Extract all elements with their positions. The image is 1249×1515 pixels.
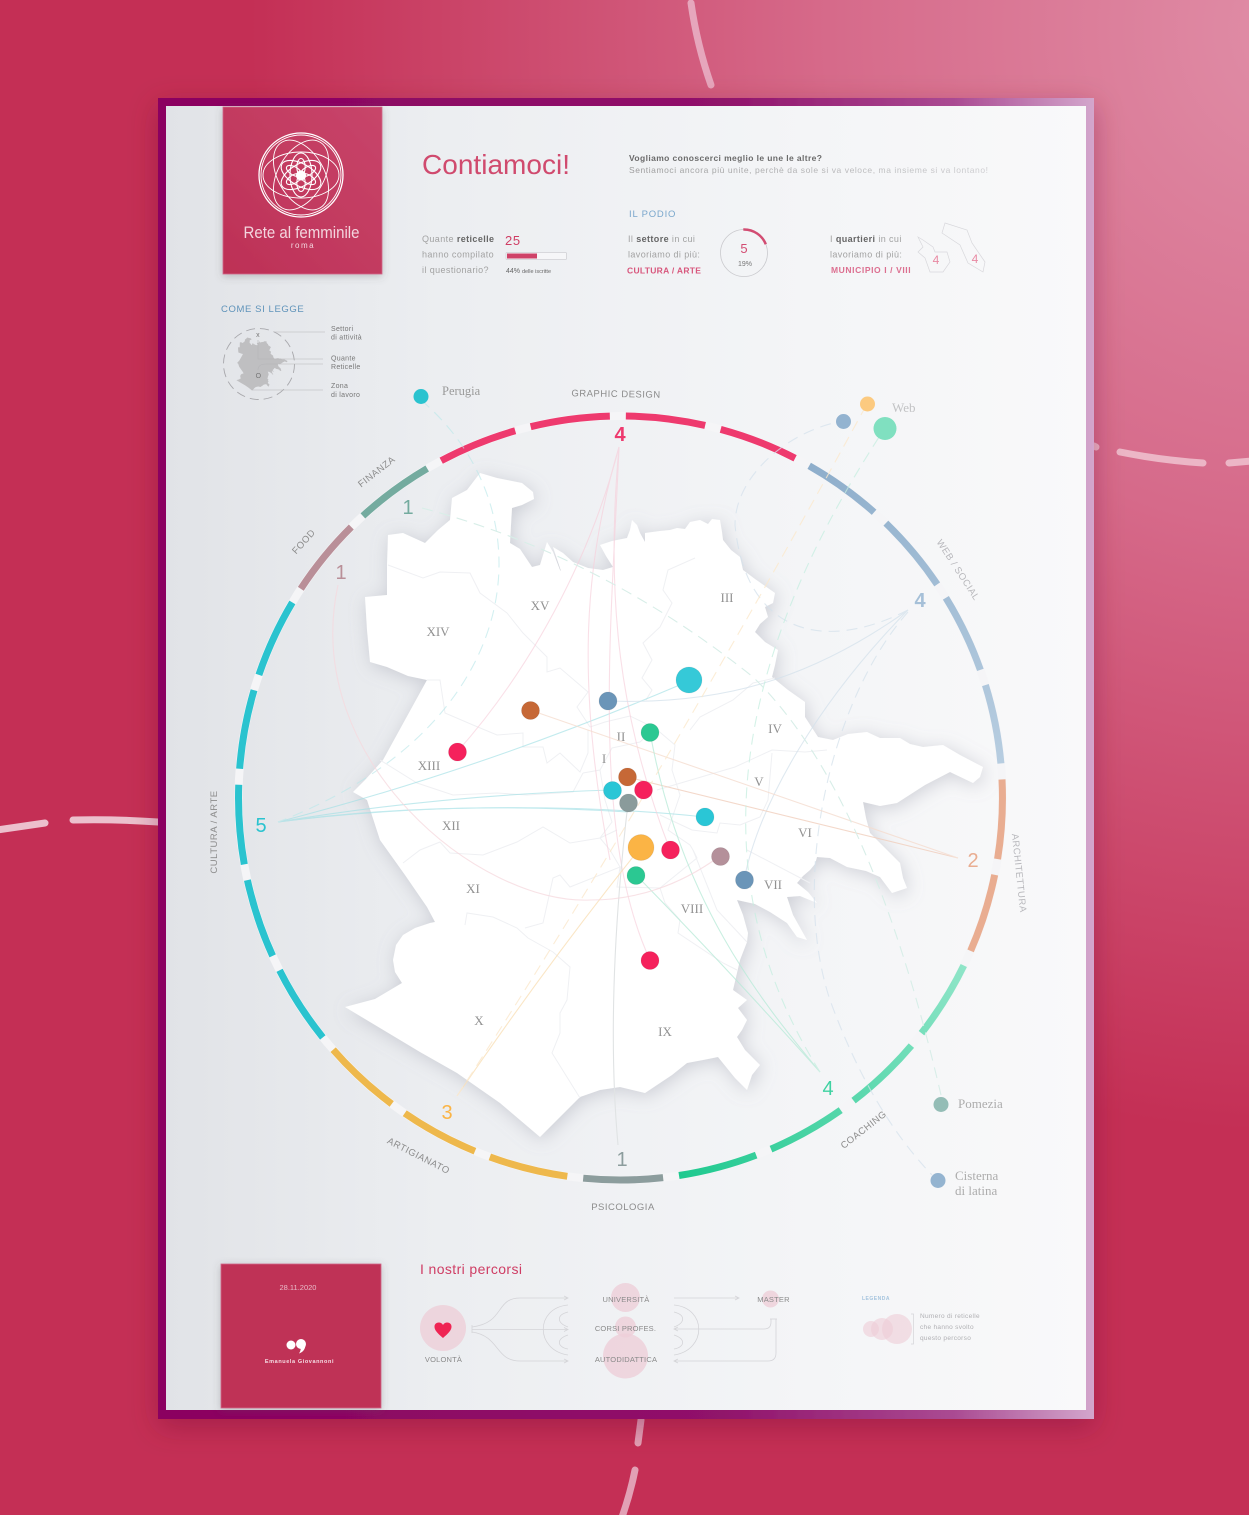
municipal labels: XII — [442, 818, 460, 833]
quartieri text: lavoriamo di più: — [830, 250, 902, 260]
path labels: UNIVERSITÀ — [602, 1295, 650, 1304]
sector labels: CULTURA / ARTE — [209, 790, 220, 874]
intro text: Sentiamoci ancora più unite, perchè da sole si va veloce, ma insieme si va lontano! — [629, 165, 988, 175]
stat question text: hanno compilato — [422, 250, 494, 260]
how to read diagram — [224, 326, 362, 400]
logo text — [244, 223, 360, 250]
gauge 19%: 19% — [738, 261, 752, 268]
arrows: from volontà — [472, 1296, 568, 1363]
decorative dashed arc: left — [0, 820, 158, 830]
progress caption: 44% delle iscritte — [506, 268, 551, 275]
logo text: Rete al femminile — [244, 223, 360, 242]
podio: quartieri — [830, 223, 985, 275]
poster sheet — [166, 106, 1086, 1410]
mini map: municipi I e VIII: 4 — [972, 252, 979, 266]
author card — [221, 1264, 381, 1408]
municipal labels: VIII — [681, 901, 703, 916]
ring sector: graphic design — [441, 416, 795, 461]
stat: questionari compilati — [422, 233, 566, 275]
sector counts: 1 — [402, 497, 414, 519]
progress bar 44% — [506, 252, 566, 260]
connection line: finanza — [422, 508, 941, 1095]
outside location: Web: Web — [892, 400, 916, 415]
municipal labels — [418, 590, 812, 1039]
quartieri text — [830, 234, 911, 275]
decorative dashed arc: top — [691, 3, 711, 85]
outside location: Perugia — [414, 384, 481, 404]
path labels: MASTER — [757, 1295, 790, 1304]
municipal labels: VII — [764, 877, 782, 892]
sector counts — [255, 424, 979, 1171]
sector counts: 2 — [967, 850, 979, 872]
reading keys: Quante — [331, 356, 356, 362]
mini map: municipi I e VIII — [918, 223, 985, 272]
stat number 25: 25 — [505, 233, 521, 248]
ring sector: finanza — [363, 468, 427, 516]
municipal labels: XIII — [418, 758, 440, 773]
mini map — [236, 337, 287, 391]
municipal labels: X — [474, 1013, 484, 1028]
heading: come si legge: COME SI LEGGE — [221, 304, 304, 315]
municipal labels: II — [617, 729, 625, 744]
dashed circle — [224, 328, 294, 400]
sector counts: 4 — [614, 424, 626, 446]
map of Rome — [345, 473, 983, 1137]
outside location: Pomezia — [934, 1096, 1003, 1112]
stat question text: il questionario? — [422, 265, 489, 275]
decorative dashed arc: bottom — [621, 1420, 641, 1515]
municipal borders — [380, 558, 827, 1098]
ring sector: coaching — [679, 966, 964, 1176]
sector labels: GRAPHIC DESIGN — [571, 388, 661, 401]
legend text — [920, 1313, 980, 1342]
reading keys: Zona — [331, 383, 348, 390]
bubbles — [420, 1283, 779, 1378]
settore text: CULTURA / ARTE — [627, 266, 701, 276]
municipal labels: XI — [466, 881, 480, 896]
stat question text — [422, 234, 494, 275]
connection lines: graphic design — [457, 447, 670, 960]
connection lines: cultura / arte — [278, 400, 705, 822]
icon: quotation marks — [286, 1339, 306, 1354]
municipal labels: IX — [658, 1024, 672, 1039]
poster frame — [158, 98, 1094, 1419]
outside location: Perugia: Perugia — [442, 384, 481, 398]
reading keys — [256, 326, 362, 399]
sector counts: 4 — [822, 1078, 834, 1100]
intro text: Vogliamo conoscerci meglio le une le altre? — [629, 153, 822, 163]
mini map: municipi I e VIII: 4 — [933, 253, 940, 267]
connection lines: architettura — [530, 710, 958, 858]
ring base — [238, 416, 1002, 1180]
connection line: psicologia — [613, 803, 628, 1145]
legend text: Numero di reticelle — [920, 1313, 980, 1320]
municipal labels: VI — [798, 825, 812, 840]
ring sector: psicologia — [583, 1178, 663, 1180]
municipal labels: III — [720, 590, 734, 605]
reading keys: Settori — [331, 326, 353, 333]
legend heading: LEGENDA — [862, 1296, 890, 1302]
legend bubbles — [863, 1314, 912, 1344]
logo card — [223, 107, 382, 274]
sector labels: FINANZA — [356, 454, 398, 490]
ring sector: food — [301, 527, 351, 589]
path labels: AUTODIDATTICA — [595, 1355, 657, 1364]
sector counts: 1 — [616, 1149, 628, 1171]
heading: i nostri percorsi: I nostri percorsi — [420, 1261, 522, 1277]
reading keys: di lavoro — [331, 392, 360, 399]
sector counts: 5 — [255, 815, 267, 837]
logo text: roma — [291, 241, 315, 250]
outside location: Cisterna di Latina: di latina — [955, 1183, 997, 1198]
heading: il podio: IL PODIO — [629, 209, 676, 220]
connection lines: coaching — [636, 428, 885, 1072]
municipal labels: XIV — [426, 624, 450, 639]
ring sector: web / social — [809, 466, 1001, 763]
quartieri text: I quartieri in cui — [830, 234, 902, 244]
gauge 19% — [720, 230, 768, 276]
sector labels — [209, 388, 1028, 1213]
arrows: between courses right — [674, 1296, 777, 1363]
reading keys: di attività — [331, 334, 362, 342]
legend text: che hanno svolto — [920, 1324, 974, 1331]
legend bracket — [911, 1314, 914, 1344]
data dots — [448, 667, 754, 970]
podio: settore — [627, 230, 768, 276]
paths diagram — [420, 1283, 790, 1378]
ring sector: artigianato — [333, 1050, 567, 1176]
sector labels: ARTIGIANATO — [385, 1136, 451, 1177]
path labels: VOLONTÀ — [425, 1355, 462, 1364]
author name: Emanuela Giovannoni — [265, 1359, 334, 1365]
outside location: Pomezia: Pomezia — [958, 1096, 1003, 1111]
sector labels: COACHING — [839, 1109, 889, 1152]
settore text: Il settore in cui — [628, 234, 695, 244]
gauge 19%: 5 — [740, 241, 748, 256]
sector labels: PSICOLOGIA — [591, 1202, 655, 1213]
connection line: food — [333, 585, 720, 900]
sector counts: 3 — [441, 1102, 453, 1124]
settore text — [627, 234, 701, 276]
connection lines: artigianato — [457, 404, 867, 1096]
sector counts: 4 — [914, 590, 926, 612]
legend — [862, 1296, 980, 1344]
intro text — [629, 153, 988, 175]
leader lines — [252, 332, 325, 390]
municipal labels: XV — [531, 598, 550, 613]
reading keys: O — [256, 373, 262, 380]
reading keys: x — [256, 332, 260, 339]
outside location: Cisterna di Latina: Cisterna — [955, 1168, 999, 1183]
sector labels: FOOD — [290, 527, 318, 557]
settore text: lavoriamo di più: — [628, 250, 700, 260]
legend text: questo percorso — [920, 1335, 971, 1342]
municipal labels: IV — [768, 721, 782, 736]
reading keys: Reticelle — [331, 364, 361, 371]
municipal labels: I — [602, 751, 606, 766]
sector labels: WEB / SOCIAL — [934, 538, 981, 603]
title: Contiamoci! — [422, 149, 570, 180]
ring sector: architettura — [971, 779, 1002, 951]
icon: heart — [434, 1322, 452, 1338]
quartieri text: MUNICIPIO I / VIII — [831, 265, 911, 275]
icon: rosette logo — [259, 131, 343, 219]
outside location: Web — [836, 396, 916, 440]
municipal labels: V — [754, 774, 764, 789]
connection lines: web / social — [608, 421, 932, 1175]
decorative dashed arc: right — [1094, 446, 1249, 463]
stat question text: Quante reticelle — [422, 234, 494, 244]
ring sector: cultura / arte — [239, 602, 323, 1037]
arrows: between courses left — [543, 1305, 568, 1355]
path labels — [425, 1295, 790, 1364]
sector labels: ARCHITETTURA — [1009, 833, 1028, 913]
path labels: CORSI PROFES. — [595, 1324, 656, 1333]
sector counts: 1 — [335, 562, 347, 584]
date: 28.11.2020 — [280, 1283, 316, 1292]
outside location: Cisterna di Latina — [930, 1168, 999, 1198]
